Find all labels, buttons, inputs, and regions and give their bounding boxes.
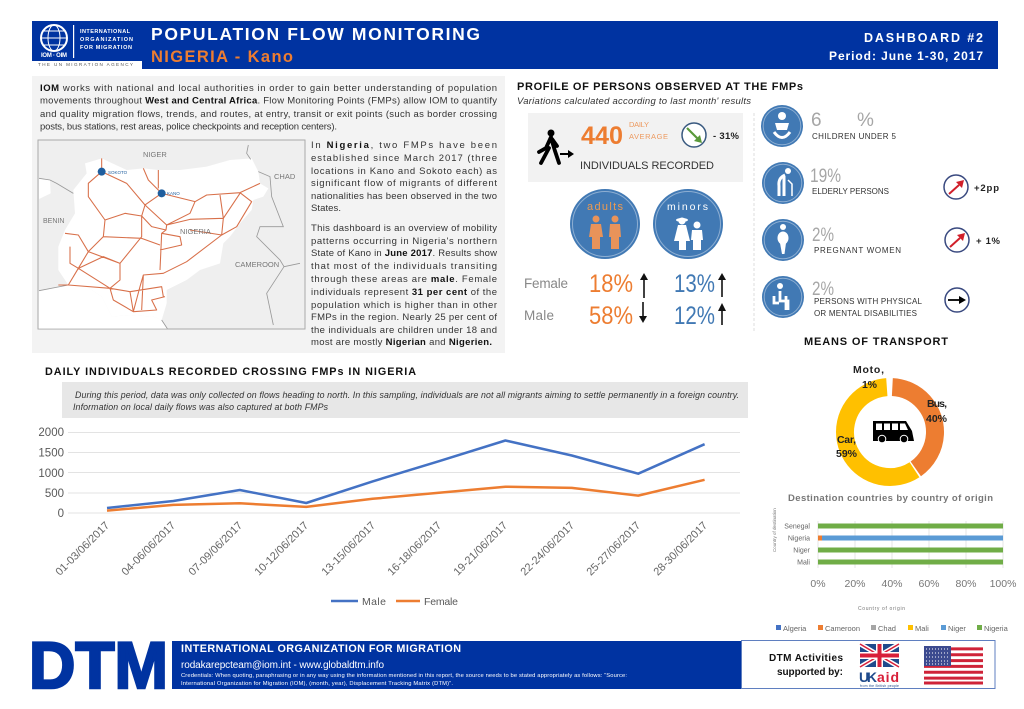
dashboard overview paragraph: the individuals are children under 18 and [311, 325, 497, 336]
daily average label: DAILY [629, 120, 649, 129]
stacked bar chart: destinations: 20% [844, 578, 866, 590]
intro paragraph: IOM works with national and local authorities in order to gain better understanding of population [40, 83, 497, 94]
Nigeria paragraph: locations in Kano and Sokoto each) as [311, 166, 497, 177]
heading: destination countries: Destination countries by country of origin [788, 493, 993, 504]
icon: elderly trend up [944, 175, 968, 199]
stacked bar chart: destinations: Country of origin [858, 606, 905, 612]
note box: Information on local daily flows was also captured at both FMPs [73, 402, 329, 412]
credentials [181, 673, 627, 687]
x axis labels: 04-06/06/2017 [119, 520, 178, 578]
series: male [107, 440, 705, 508]
map of Nigeria: BENIN [43, 218, 64, 225]
label: car: 59% [836, 448, 858, 460]
icon: adults: adults [587, 201, 624, 213]
dashboard overview paragraph: population which is higher than in other [311, 300, 497, 311]
adult male: 58% [589, 302, 633, 330]
x axis labels [53, 520, 710, 578]
x axis labels: 10-12/06/2017 [252, 520, 311, 578]
Nigeria paragraph [311, 140, 497, 214]
legend: bar chart: Algeria [783, 624, 807, 633]
arrow up [640, 273, 648, 298]
supporters box [742, 640, 995, 688]
credentials: Credentials: When quoting, paraphrasing or in any way using the information mentioned in this report, the source needs to be stated appropriately as follows: “Source: [181, 673, 627, 679]
IOM logo: THE UN MIGRATION AGENCY [38, 62, 133, 67]
label: moto: Moto, [853, 364, 884, 376]
dashboard overview paragraph: that most of the individuals transiting [311, 261, 497, 272]
IOM logo: INTERNATIONAL [80, 29, 131, 35]
stacked bar chart: destinations: Niger [793, 548, 811, 554]
stacked bar chart: destinations: Mali [797, 560, 810, 566]
organization name: INTERNATIONAL ORGANIZATION FOR MIGRATION [181, 643, 461, 655]
icon: adults [570, 189, 640, 259]
stacked bar chart: destinations: 0% [810, 578, 826, 590]
x axis labels: 07-09/06/2017 [186, 520, 245, 578]
x axis labels: 19-21/06/2017 [451, 520, 510, 578]
DTM logo: DTM [29, 628, 168, 702]
legend: bar chart: Mali [915, 624, 929, 633]
row label: female: Female [524, 276, 568, 291]
adult female: 18% [589, 270, 633, 298]
Nigeria paragraph: In Nigeria, two FMPs have been [311, 140, 497, 151]
map of Nigeria: NIGERIA [180, 227, 211, 236]
icon: minors: minors [667, 201, 708, 213]
stacked bar chart: destinations: 40% [881, 578, 903, 590]
dashboard overview paragraph: This dashboard is an overview of mobility [311, 223, 497, 234]
pregnant label: PREGNANT WOMEN [814, 246, 901, 255]
x axis labels: 16-18/06/2017 [385, 520, 444, 578]
stacked bar chart: destinations: 100% [990, 578, 1016, 590]
note box: During this period, data was only collected on flows heading to north. In this sampling, individuals are not all migrants aiming to settle permanently in a foreign country. [75, 390, 739, 400]
x axis labels: 28-30/06/2017 [651, 520, 710, 578]
stacked bar chart: destinations: 80% [955, 578, 977, 590]
header banner [32, 21, 998, 69]
elderly variation: +2pp [974, 183, 999, 194]
title: POPULATION FLOW MONITORING [151, 24, 480, 44]
disability label [814, 297, 923, 318]
y axis labels: 500 [45, 488, 64, 500]
legend: line chart [331, 596, 458, 608]
icon: elderly [762, 162, 804, 204]
IOM logo [38, 25, 133, 67]
Nigeria paragraph: States. [311, 203, 341, 214]
credentials: International Organization for Migration (IOM), (month, year), Displacement Tracking Matrix (DTM)”. [181, 681, 453, 687]
map of Nigeria: NIGER [143, 150, 167, 159]
panel: introduction [32, 76, 505, 353]
icon: down trend arrow [682, 123, 706, 147]
icon: walking person [539, 130, 574, 163]
icon: pregnant [762, 219, 804, 261]
intro paragraph: posts, bus stations, rest areas, police checkpoints and reception centers). [40, 122, 337, 132]
minor female: 13% [674, 270, 715, 298]
dashboard overview paragraph: through these areas are male. Female [311, 274, 497, 285]
label: bus: 40% [926, 413, 948, 425]
Nigeria paragraph: established since March 2017 (three [311, 153, 497, 164]
elderly stat: 19% [810, 166, 841, 187]
stacked bar chart: destinations: Country of destination [772, 508, 777, 552]
y axis labels: 2000 [38, 427, 64, 439]
intro paragraph [40, 83, 497, 132]
label: bus [926, 398, 948, 425]
series: female [107, 480, 705, 511]
legend: bar chart: Chad [878, 624, 896, 633]
dashboard overview paragraph: patterns occurring in Nigeria's northern [311, 236, 497, 247]
map of Nigeria: CHAD [274, 172, 296, 181]
adults and minors by sex [524, 270, 726, 330]
map of Nigeria: KANO [167, 191, 180, 196]
dashboard overview paragraph [311, 223, 497, 348]
disability stat: 2% [812, 279, 834, 300]
profile subtitle: Variations calculated according to last month' results [517, 96, 751, 107]
legend: line chart: Female [424, 596, 458, 608]
footer blue panel [172, 641, 742, 689]
icon: child [761, 105, 803, 147]
map of Nigeria: CAMEROON [235, 260, 279, 269]
icon: minors [653, 189, 723, 259]
children stat: 6 [811, 110, 822, 131]
heading: profile of persons: PROFILE OF PERSONS OBSERVED AT THE FMPs [517, 81, 803, 93]
pregnant stat: 2% [812, 225, 834, 246]
legend: line chart: Male [362, 596, 386, 608]
stacked bar chart: destinations [772, 508, 1016, 612]
contact: rodakarepcteam@iom.int - www.globaldtm.info [181, 660, 384, 671]
panel: individuals recorded [528, 113, 743, 182]
y axis labels [38, 427, 64, 520]
y axis labels: 1500 [38, 448, 64, 460]
icon: pregnant trend up [945, 228, 969, 252]
supporters text [769, 653, 843, 678]
intro paragraph: movements throughout West and Central Africa. Flow Monitoring Points (FMPs) allow IOM to quantify [40, 96, 497, 106]
stacked bar chart: destinations: Nigeria [788, 536, 810, 542]
panel: vulnerable groups: % [857, 110, 874, 131]
donut chart: means of transport [828, 364, 952, 494]
line chart: daily individuals [38, 427, 740, 608]
dashboard overview paragraph: State of Kano in June 2017. Results show [311, 248, 497, 259]
arrow down [639, 302, 647, 323]
x axis labels: 25-27/06/2017 [584, 520, 643, 578]
supporters text: supported by: [777, 667, 843, 678]
disability label: OR MENTAL DISABILITIES [814, 309, 917, 318]
note box [62, 382, 748, 418]
arrow up [718, 273, 726, 297]
dashboard overview paragraph: most are mostly Nigerian and Nigerien. [311, 337, 492, 348]
map of Nigeria [38, 140, 305, 329]
supporters text: DTM Activities [769, 653, 843, 664]
legend: bar chart: Cameroon [825, 624, 860, 633]
IOM logo: ORGANIZATION [80, 37, 133, 43]
legend: bar chart: Niger [948, 624, 966, 633]
UK aid label: from the British people [860, 684, 899, 688]
UK aid label [859, 669, 899, 688]
label: moto [853, 364, 884, 391]
pregnant variation: + 1% [976, 236, 1001, 247]
Nigeria paragraph: nationalities has been observed in the two [311, 191, 497, 202]
label: bus: Bus, [927, 398, 947, 410]
label: moto: 1% [862, 379, 878, 391]
y axis labels: 1000 [38, 468, 64, 480]
intro paragraph: and quality migration flows, trends, and routes, at entry, transit or exit points (such as border crossing [40, 109, 497, 120]
average number: 440 [581, 122, 623, 150]
UK aid label: UK [859, 669, 877, 685]
variation: - 31% [713, 131, 740, 142]
disability label: PERSONS WITH PHYSICAL [814, 297, 923, 306]
map of Nigeria: SOKOTO [108, 170, 128, 175]
period: Period: June 1-30, 2017 [829, 49, 983, 63]
dashboard overview paragraph: individuals represent 31 per cent of the [311, 287, 497, 298]
icon: disability trend flat [945, 288, 969, 312]
stacked bar chart: destinations: Senegal [784, 524, 810, 530]
heading: means of transport: MEANS OF TRANSPORT [804, 336, 948, 348]
IOM logo: IOM · OIM [41, 53, 67, 59]
Nigeria paragraph: significant flow of migrants of different [311, 178, 497, 189]
individuals recorded label: INDIVIDUALS RECORDED [580, 160, 714, 172]
label: car: Car, [837, 434, 856, 446]
icon: disability [762, 276, 804, 318]
UK aid label: aid [877, 669, 899, 685]
panel: vulnerable groups [761, 105, 1001, 318]
row label: male: Male [524, 308, 554, 323]
x axis labels: 01-03/06/2017 [53, 520, 112, 578]
icon: bus [873, 421, 914, 443]
footer [29, 628, 995, 702]
elderly label: ELDERLY PERSONS [812, 187, 889, 196]
icon: UK flag [860, 644, 899, 667]
legend: bar chart: Nigeria [984, 624, 1009, 633]
panel: individuals recorded: AVERAGE [629, 132, 668, 141]
IOM logo: FOR MIGRATION [80, 45, 132, 51]
label: car [836, 434, 858, 460]
y axis labels: 0 [58, 508, 64, 520]
heading: daily individuals: DAILY INDIVIDUALS RECORDED CROSSING FMPs IN NIGERIA [45, 366, 416, 378]
x axis labels: 13-15/06/2017 [319, 520, 378, 578]
x axis labels: 22-24/06/2017 [518, 520, 577, 578]
subtitle: NIGERIA - Kano [151, 48, 293, 66]
children label: CHILDREN UNDER 5 [812, 132, 897, 141]
dashboard overview paragraph: FMPs in the region. Nearly 25 per cent of [311, 312, 497, 323]
stacked bar chart: destinations: 60% [918, 578, 940, 590]
dashboard number: DASHBOARD #2 [864, 31, 983, 45]
minor male: 12% [674, 302, 715, 330]
legend: bar chart [776, 624, 1009, 633]
icon: US flag [924, 646, 983, 684]
arrow up [718, 303, 726, 325]
